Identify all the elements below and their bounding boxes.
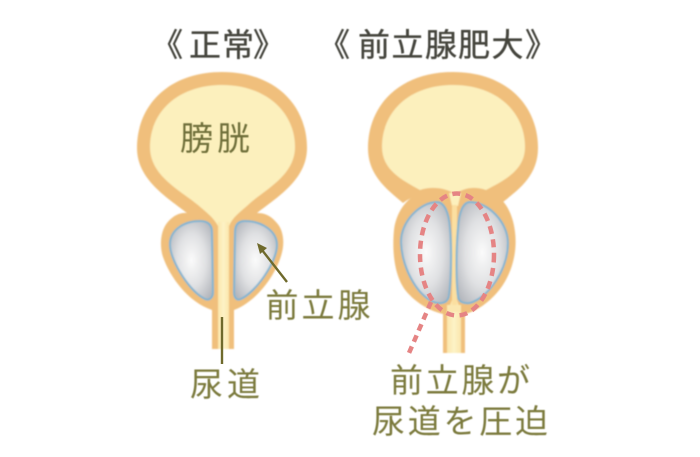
urethra: enlarged [447,193,461,353]
diagram: normal prostate [137,72,307,349]
text labels [151,27,557,440]
label: prostate compresses urethra: 前立腺が [390,362,530,399]
capsule: enlarged prostate [393,190,516,353]
label: bladder: 膀胱 [180,120,250,157]
bladder: enlarged [368,72,538,203]
urethra: normal [218,222,229,349]
lobe: enlarged right [456,202,508,303]
label: prostate: 前立腺 [266,287,370,324]
lobe: normal right [234,221,277,300]
label: prostate compresses urethra [372,362,548,440]
heading: normal: 《正常》 [151,27,285,63]
leader line: urethra [221,317,223,364]
dashed outline: compressed area [420,194,494,316]
lobe: enlarged left [401,202,451,303]
bladder: normal [137,72,307,232]
label: urethra: 尿道 [190,366,260,403]
lobe: normal left [170,221,213,300]
heading: enlarged prostate: 《前立腺肥大》 [318,27,557,63]
dashed leader: compressed area [409,302,431,353]
diagram: enlarged prostate [368,72,538,353]
label: prostate compresses urethra: 尿道を圧迫 [372,403,548,440]
arrow: prostate leader [257,243,287,282]
capsule: normal prostate [161,213,283,349]
